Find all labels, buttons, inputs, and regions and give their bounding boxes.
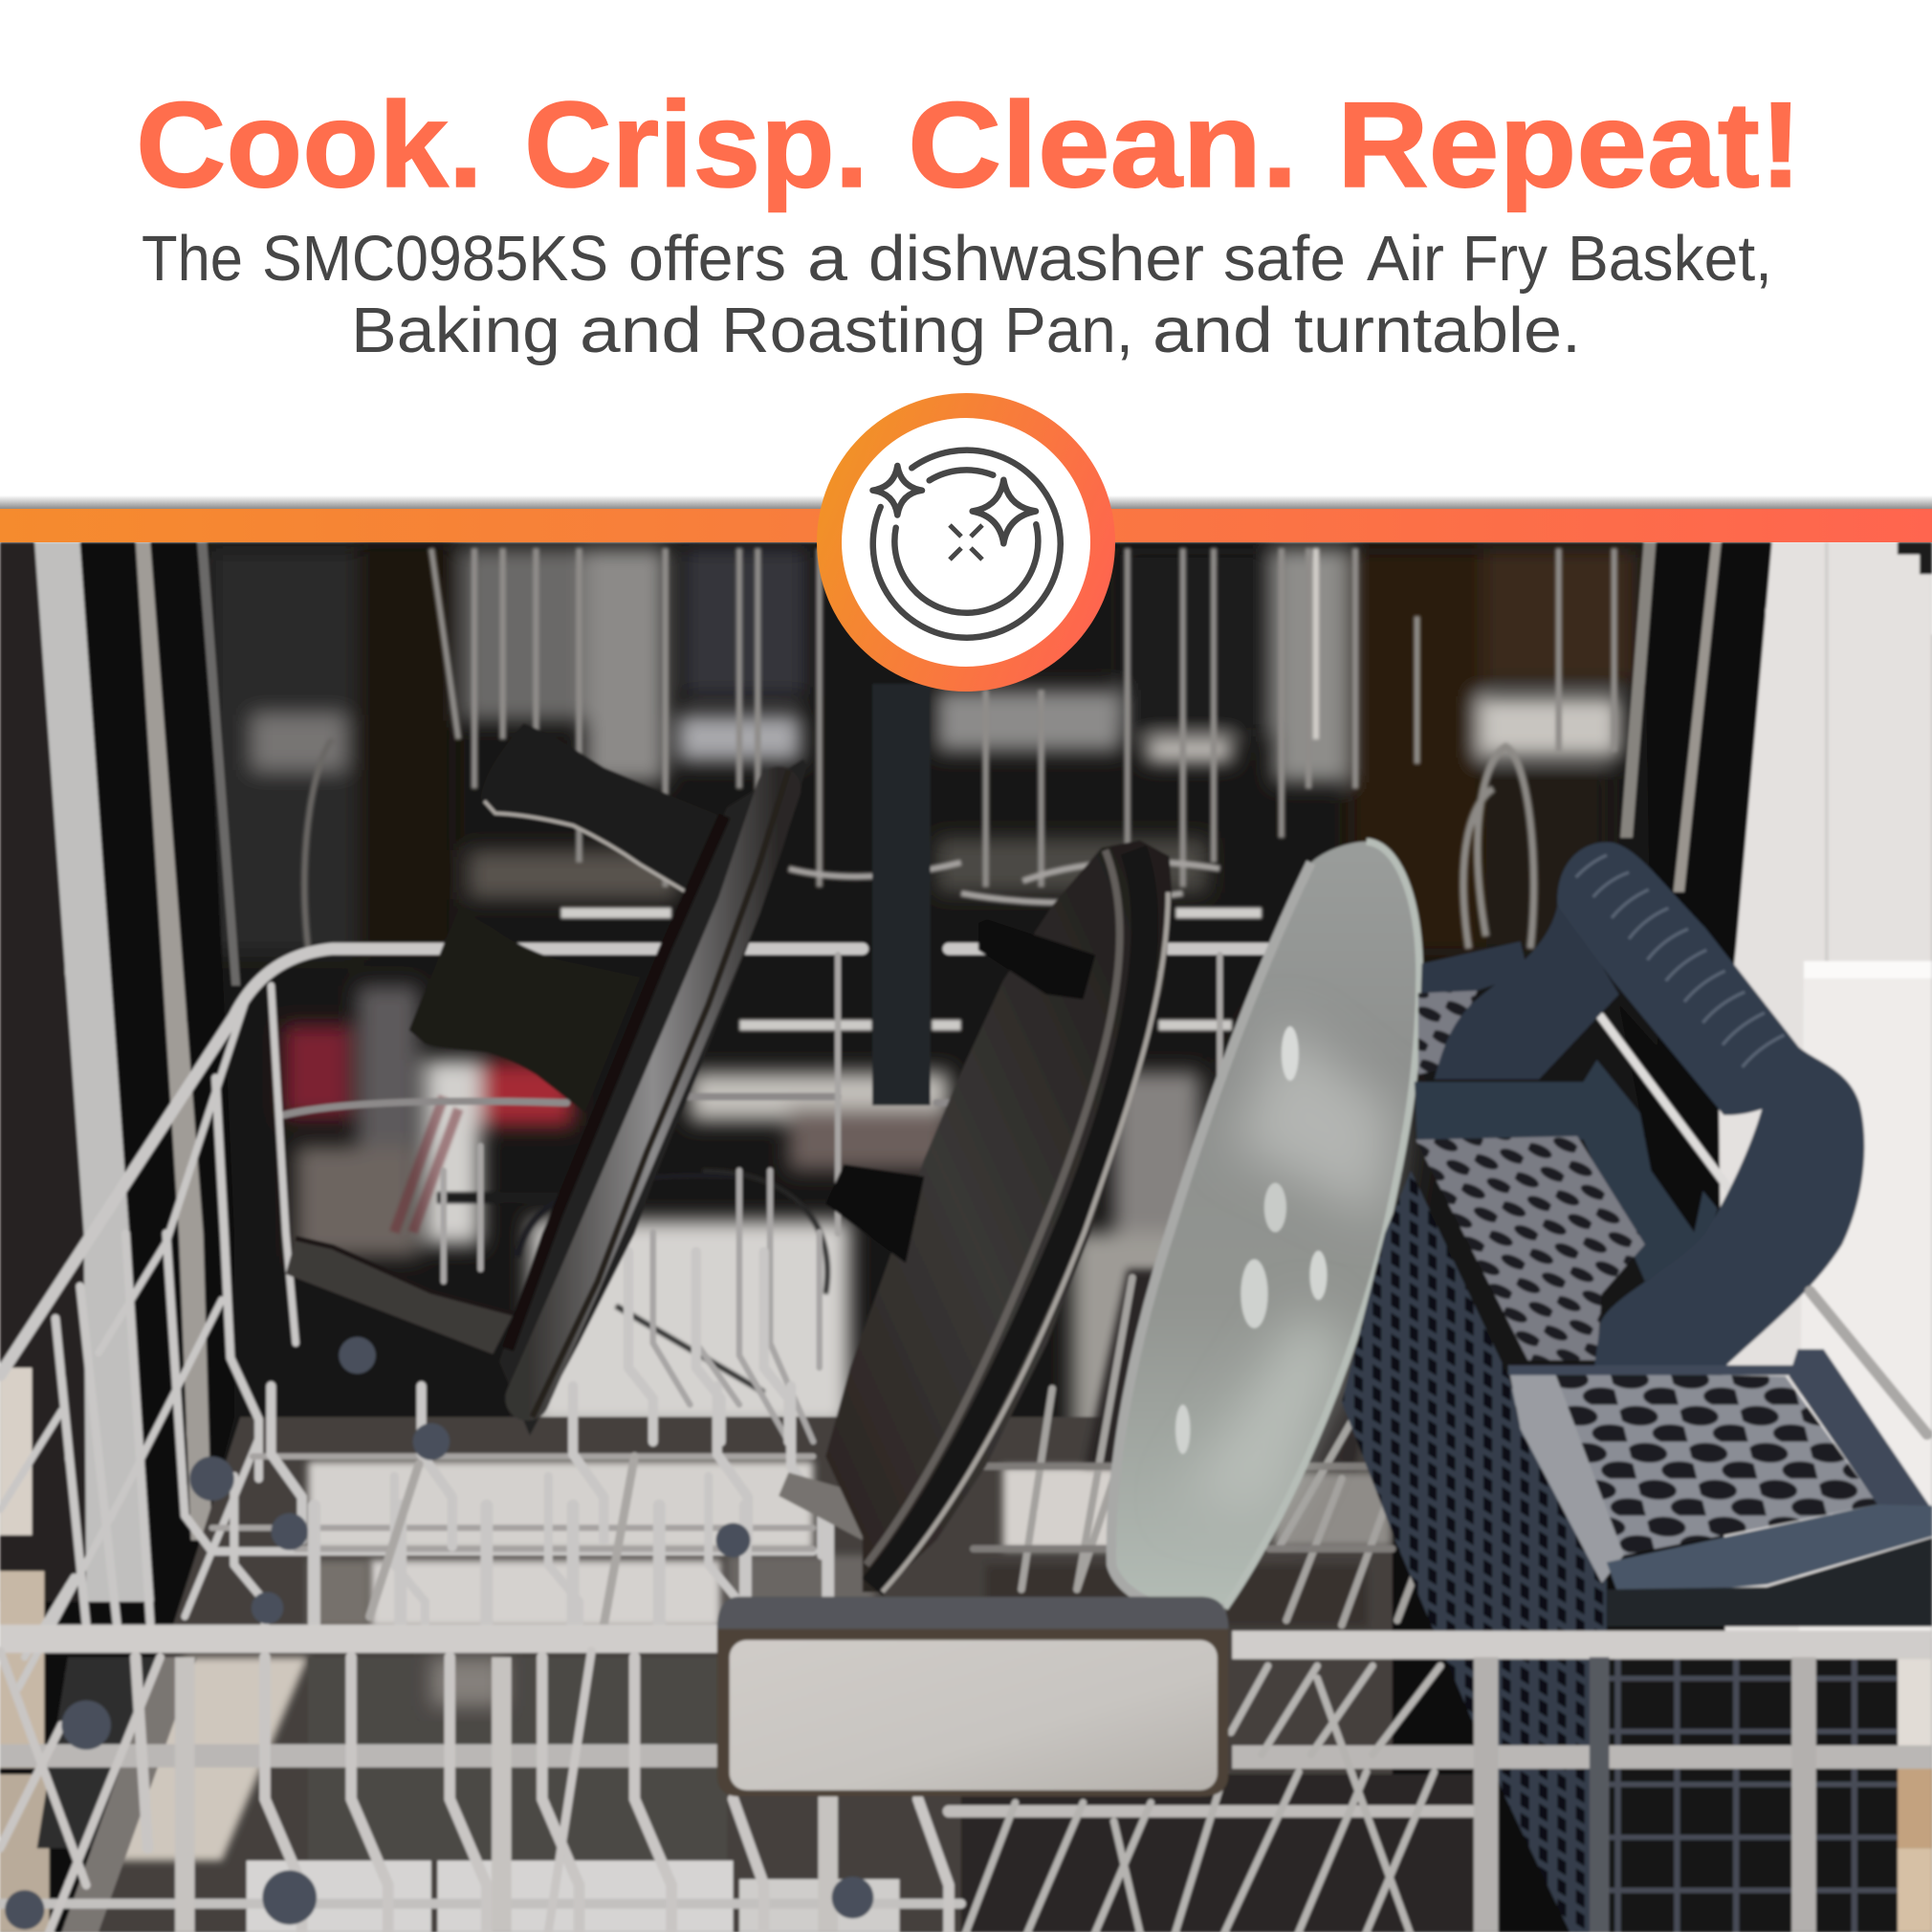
badge centre: [842, 418, 1090, 667]
pan bottom handle: [779, 1472, 888, 1540]
subtitle line 1: Basket,: [1568, 223, 1772, 295]
title: Cook.: [136, 77, 483, 212]
front basket left lip: [1508, 1365, 1624, 1583]
pan left: air fry basket: [286, 723, 807, 1436]
subtitle line 2: Roasting: [721, 295, 986, 366]
band shadow: [0, 495, 1932, 509]
front face: [1607, 1538, 1932, 1627]
rack handle: [717, 1597, 1228, 1796]
subtitle line 1: safe: [1223, 223, 1346, 295]
handle top: [480, 723, 723, 892]
subtitle line 1: Air: [1367, 223, 1444, 295]
title: [136, 77, 1802, 212]
pan tabs: [978, 919, 1095, 999]
subtitle: [142, 223, 1772, 366]
pan right: baking and roasting pan: [779, 841, 1172, 1592]
photo: dishwasher rack with pans and turntable: [0, 542, 1932, 1932]
basket front lip: [1607, 1504, 1932, 1597]
subtitle line 1: offers: [628, 223, 786, 295]
subtitle line 1: The: [142, 223, 243, 295]
title: Repeat!: [1337, 77, 1802, 212]
right cabinet and door frame: [1620, 542, 1932, 1932]
handle fin: [1435, 906, 1619, 1080]
pan rim: [872, 850, 1145, 1587]
tub floor: [0, 1269, 1491, 1932]
badge ring: [817, 393, 1115, 692]
rack wire behind handle: [1600, 1017, 1730, 1190]
far basket: [1418, 941, 1527, 1074]
glass turntable: [1111, 842, 1419, 1612]
back and side rack wires: [0, 949, 1435, 1688]
back basket grid: [1416, 1136, 1645, 1360]
icon: plate with sparkles: [872, 450, 1061, 638]
subtitle line 1: SMC0985KS: [262, 223, 608, 295]
left door frame: [0, 542, 240, 1602]
title: Clean.: [908, 77, 1298, 212]
compartment wall: [1415, 1060, 1718, 1282]
center spray tube: [872, 684, 931, 1106]
handle bottom: [286, 1239, 514, 1354]
handle grip ribs: [1576, 855, 1784, 1067]
subtitle line 2: turntable.: [1294, 295, 1581, 366]
lower front grid: [1607, 1651, 1898, 1932]
pan body: [825, 841, 1172, 1592]
rack hubs: [5, 1337, 873, 1929]
utensil caddy: [1342, 843, 1932, 1932]
title: Crisp.: [524, 77, 868, 212]
orange gradient band: [0, 509, 1932, 542]
subtitle line 2: Baking: [351, 295, 560, 366]
handle middle: [409, 908, 641, 1112]
subtitle line 1: Fry: [1462, 223, 1548, 295]
front basket grid: [1508, 1372, 1877, 1559]
subtitle line 1: dishwasher: [868, 223, 1204, 295]
rim: [499, 759, 807, 1436]
dishwasher rear wall reflections: [0, 542, 1932, 1932]
handle: [1557, 843, 1864, 1367]
front basket walls: [1508, 1350, 1932, 1516]
subtitle line 2: Pan,: [1004, 295, 1133, 366]
side mesh: [1342, 1171, 1607, 1932]
subtitle line 2: and: [580, 295, 702, 366]
black gap behind handle: [1619, 1004, 1719, 1232]
subtitle line 2: and: [1153, 295, 1273, 366]
top white header panel: [0, 0, 1932, 495]
front rack wires: [0, 1291, 1932, 1932]
subtitle line 1: [142, 223, 1772, 295]
icon badge: sparkling clean plate: [817, 393, 1115, 692]
subtitle line 2: [351, 295, 1581, 366]
subtitle line 1: a: [807, 223, 848, 295]
